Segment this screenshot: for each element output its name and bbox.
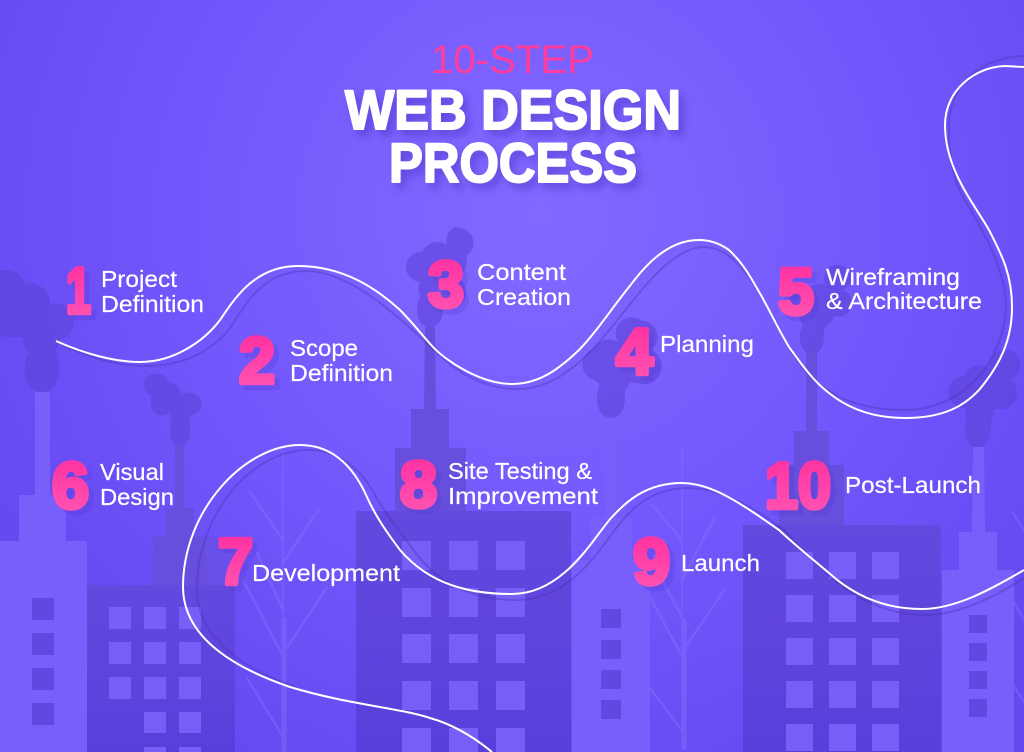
step 4: 4 xyxy=(621,320,658,393)
step 8: Site Testing & xyxy=(448,458,592,484)
step 10 xyxy=(765,449,981,527)
lower curve shadow xyxy=(197,450,1024,687)
title line: PROCESS: PROCESS xyxy=(389,131,637,194)
step 7: 7 xyxy=(223,530,258,603)
lower white curve xyxy=(183,445,1024,752)
step 6 xyxy=(52,449,174,527)
tree 2 xyxy=(650,445,724,748)
step 9 xyxy=(633,525,760,603)
building: centre-right tower xyxy=(572,428,650,752)
building: left tower xyxy=(0,392,87,752)
step 1 xyxy=(66,254,204,332)
step 3: Content xyxy=(477,259,567,285)
step 2: Scope xyxy=(290,335,358,361)
tree 3 xyxy=(1012,513,1024,702)
tree 1 xyxy=(243,450,327,750)
step 2: 2 xyxy=(239,324,275,397)
step 9: 9 xyxy=(638,530,675,603)
step 1: 1 xyxy=(66,254,91,327)
step 8: 8 xyxy=(405,453,442,526)
step 6: Visual xyxy=(100,459,164,485)
upper curve shadow xyxy=(62,56,1024,410)
smoke cluster 6 xyxy=(948,349,1020,449)
step 10: Post-Launch xyxy=(845,472,981,498)
building: middle dark block xyxy=(356,327,571,752)
step 2: 2 xyxy=(244,329,280,402)
step 1: Definition xyxy=(101,291,204,317)
smoke cluster 1 xyxy=(0,270,74,392)
building: left dark block xyxy=(87,445,235,752)
step 4: 4 xyxy=(616,315,653,388)
step 6: 6 xyxy=(57,454,94,527)
step 3: 3 xyxy=(428,248,464,321)
smoke cluster 5 xyxy=(789,265,852,354)
step 1: Project xyxy=(101,266,178,292)
step 3: 3 xyxy=(433,253,469,326)
step 5 xyxy=(778,255,982,333)
step 9: Launch xyxy=(681,550,760,576)
step 6: 6 xyxy=(52,449,89,522)
step 3 xyxy=(428,248,571,326)
step 10: 10 xyxy=(770,454,836,527)
smoke cluster 4 xyxy=(582,317,662,418)
step 10: 10 xyxy=(765,449,831,522)
step 8 xyxy=(400,448,599,526)
title line: WEB DESIGN: WEB DESIGN xyxy=(345,78,681,141)
step 4: Planning xyxy=(660,331,754,357)
smoke cluster 2 xyxy=(144,374,202,447)
step 1: 1 xyxy=(71,259,96,332)
step 7: Development xyxy=(252,560,401,586)
step 2 xyxy=(239,324,393,402)
step 7 xyxy=(218,525,401,603)
step 4 xyxy=(616,315,754,393)
step 5: & Architecture xyxy=(826,288,982,314)
step 6: Design xyxy=(100,484,174,510)
building: right dark block xyxy=(743,350,941,752)
step 5: 5 xyxy=(783,260,819,333)
title line: 10-STEP: 10-STEP xyxy=(431,38,594,82)
step 7: 7 xyxy=(218,525,253,598)
step 5: 5 xyxy=(778,255,814,328)
smoke cluster 3 xyxy=(406,226,474,327)
step 8: 8 xyxy=(400,448,437,521)
upper white curve xyxy=(56,66,1024,418)
step 2: Definition xyxy=(290,360,393,386)
building: far-right tower xyxy=(942,447,1014,752)
step 3: Creation xyxy=(477,284,571,310)
step 5: Wireframing xyxy=(826,264,960,290)
step 8: Improvement xyxy=(448,483,599,509)
step 9: 9 xyxy=(633,525,670,598)
